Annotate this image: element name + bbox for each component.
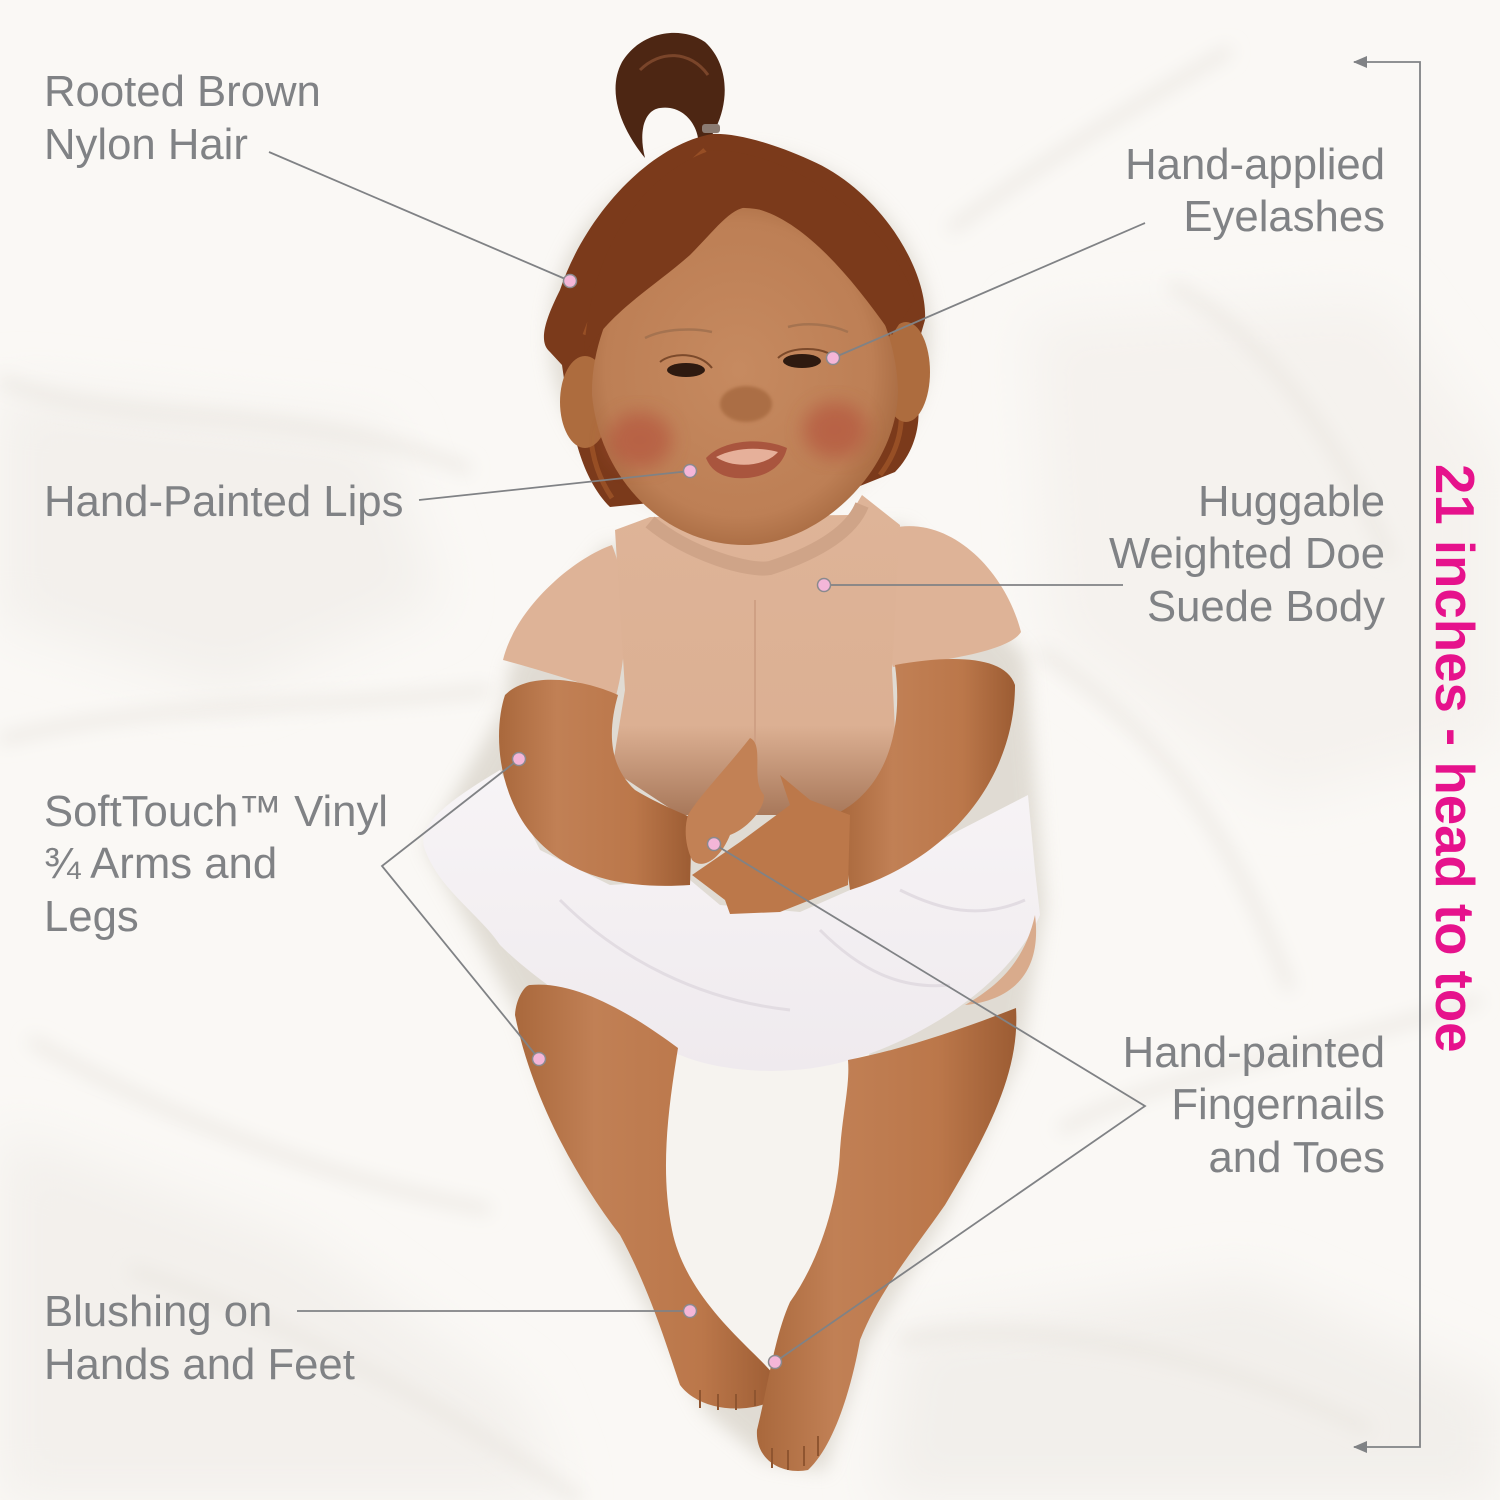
sleeves	[503, 545, 625, 696]
callout: fingernails: Hand-painted	[1123, 1028, 1385, 1077]
callout: vinyl: Legs	[44, 892, 139, 941]
cheeks	[608, 412, 672, 468]
callout: eyelashes: Hand-applied	[1125, 140, 1385, 189]
callout: body: Weighted Doe	[1109, 529, 1385, 578]
measurement bracket arrow	[1353, 56, 1420, 1453]
left leg	[515, 985, 781, 1409]
callout: fingernails	[708, 838, 1385, 1368]
callout: blushing: Hands and Feet	[44, 1340, 355, 1389]
soft shadow beneath doll	[425, 151, 1045, 1471]
collar and seams	[650, 505, 862, 569]
hair topknot	[616, 33, 725, 158]
callout: rooted hair	[44, 67, 576, 288]
callout: blushing: Blushing on	[44, 1287, 272, 1336]
callout: fingernails: Fingernails	[1171, 1080, 1385, 1129]
sheet visible between the legs	[640, 1040, 870, 1400]
head	[592, 208, 898, 545]
doll illustration	[423, 33, 1045, 1471]
callout: vinyl: SoftTouch™ Vinyl	[44, 787, 388, 836]
right hand	[692, 775, 850, 914]
callout: body	[818, 477, 1385, 631]
callout: rooted hair: Rooted Brown	[44, 67, 321, 116]
toes	[700, 1390, 818, 1470]
callout: lips	[44, 464, 696, 526]
hair mass	[544, 134, 925, 507]
callout: vinyl	[44, 752, 546, 1066]
callout: body: Suede Body	[1147, 582, 1385, 631]
height label: 21 inches - head to toe	[1424, 464, 1485, 1053]
callout: fingernails: and Toes	[1208, 1133, 1385, 1182]
right leg	[757, 1008, 1016, 1471]
left hand	[686, 738, 764, 864]
left arm	[499, 680, 692, 886]
right arm	[840, 659, 1015, 890]
fringe	[584, 150, 915, 355]
cloth wrap	[423, 770, 1040, 1071]
eyebrows	[645, 324, 848, 338]
callout: eyelashes	[826, 140, 1385, 364]
mouth	[706, 441, 787, 478]
callout: body: Huggable	[1198, 477, 1385, 526]
hair tie	[702, 124, 720, 133]
cloth folds	[560, 890, 1025, 1010]
callout: eyelashes: Eyelashes	[1183, 192, 1385, 241]
callout: rooted hair: Nylon Hair	[44, 120, 248, 169]
nose	[720, 386, 772, 422]
callout: vinyl: ¾ Arms and	[44, 839, 277, 888]
callout: lips: Hand-Painted Lips	[44, 477, 403, 526]
hip patch	[965, 915, 1036, 1005]
ears	[560, 356, 610, 448]
callout: blushing	[44, 1287, 696, 1389]
eyes	[667, 363, 705, 377]
torso	[612, 495, 900, 815]
